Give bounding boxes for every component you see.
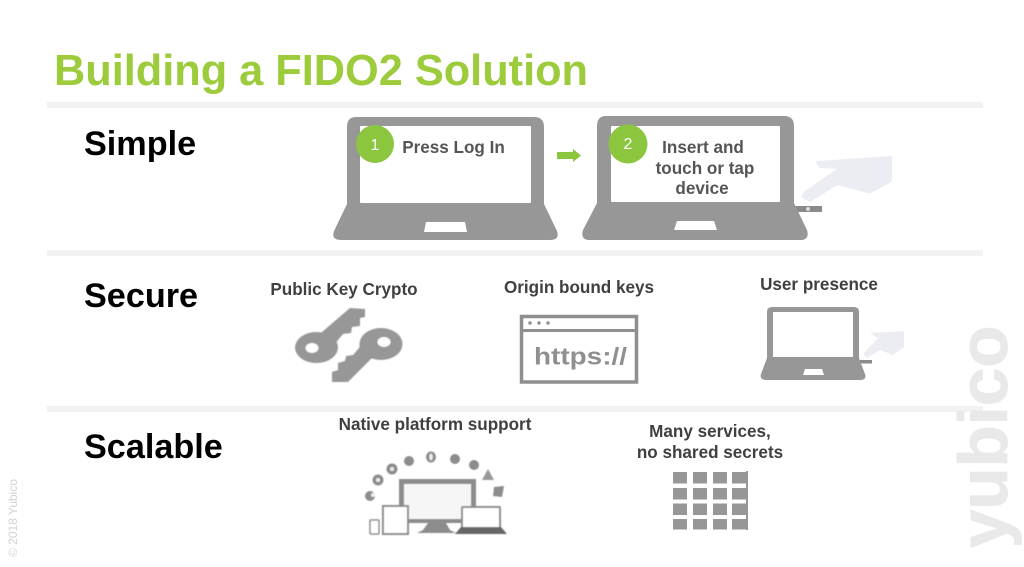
heading: Secure: Secure (84, 277, 198, 315)
title: Building a FIDO2 Solution (54, 47, 588, 95)
tablet (383, 506, 408, 534)
step 2: laptop insert and touch device: device (675, 179, 729, 198)
watermark: yubico: yubico (945, 326, 1022, 548)
step 1: laptop press log in: Press Log In (402, 138, 505, 157)
hand pointer (803, 157, 891, 201)
heading: Simple: Simple (84, 125, 196, 163)
heading: Scalable: Scalable (84, 428, 223, 466)
step 2: laptop insert and touch device (582, 116, 891, 240)
icon: grid (673, 471, 748, 530)
monitor (399, 479, 476, 533)
label: Many services, no shared secrets: Many services, (649, 422, 771, 441)
platform logos (365, 452, 504, 501)
label: Many services, no shared secrets (637, 422, 783, 462)
step 2: laptop insert and touch device: Insert and (662, 138, 744, 157)
label: Public Key Crypto: Public Key Crypto (270, 280, 418, 299)
label: Many services, no shared secrets: no shared secrets (637, 443, 783, 462)
step 1: laptop press log in: 1 (371, 137, 380, 154)
usb key (795, 206, 822, 212)
step 1: laptop press log in (333, 117, 558, 240)
step 2: laptop insert and touch device: touch or tap (656, 159, 754, 178)
icon: browser window: https:// (534, 344, 627, 370)
label: User presence: User presence (760, 275, 878, 294)
icon: keys (295, 308, 402, 382)
icon: browser window (521, 316, 637, 382)
phone (370, 520, 379, 534)
icon: laptop with key and hand (761, 307, 904, 380)
arrow: step 1 to step 2 (557, 149, 581, 162)
step 2: laptop insert and touch device: 2 (624, 136, 633, 153)
label: Origin bound keys: Origin bound keys (504, 278, 654, 297)
label: Native platform support: Native platform support (339, 415, 532, 434)
icon: devices and platforms (365, 452, 507, 534)
small laptop (462, 507, 500, 528)
copyright: © 2018 Yubico (6, 479, 20, 557)
